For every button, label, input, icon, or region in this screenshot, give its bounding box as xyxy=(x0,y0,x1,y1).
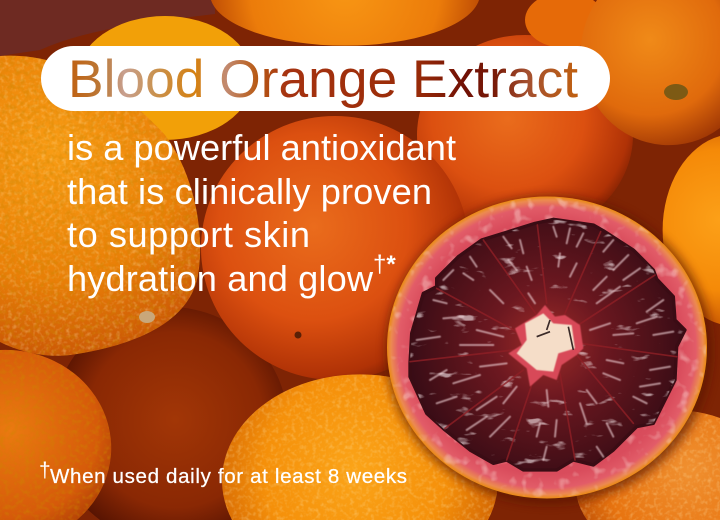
orange: upper middle right xyxy=(417,35,633,235)
blood orange slice xyxy=(386,196,712,504)
flesh mass xyxy=(410,219,685,470)
title pill xyxy=(41,46,610,111)
white center pith xyxy=(517,313,575,372)
orange: big left xyxy=(0,56,200,356)
footnote text: When used daily for at least 8 weeks xyxy=(50,465,407,488)
glossy pulp highlights xyxy=(408,218,687,472)
orange: top right xyxy=(581,0,720,145)
line 1: is a powerful antioxidant xyxy=(67,127,456,168)
slice rind and albedo xyxy=(387,196,707,498)
line 3: to support skin xyxy=(67,214,310,255)
orange: bottom right xyxy=(576,410,720,520)
orange: lower left behind xyxy=(52,307,288,520)
superscript dagger and asterisk: †* xyxy=(373,251,396,278)
orange: bottom left xyxy=(0,350,111,520)
orange: right edge xyxy=(663,136,720,324)
orange: top center xyxy=(211,0,479,46)
peel pits xyxy=(0,56,200,520)
orange: upper left behind title xyxy=(77,16,253,140)
flesh segments xyxy=(408,218,687,472)
rind mottling xyxy=(387,197,707,498)
title text: Blood Orange Extract xyxy=(68,50,578,109)
footnote xyxy=(39,459,407,488)
orange stem: left xyxy=(139,311,155,323)
line 4: hydration and glow xyxy=(67,258,374,299)
dark top-left corner xyxy=(0,0,215,56)
orange: top right small xyxy=(525,0,605,48)
segment highlights xyxy=(417,227,673,460)
line 2: that is clinically proven xyxy=(67,171,432,212)
shadow beneath slice xyxy=(386,196,712,504)
center core marks xyxy=(537,320,573,350)
pill background xyxy=(41,46,610,111)
dagger: † xyxy=(39,459,51,482)
orange: bottom center xyxy=(222,374,498,520)
orange: center xyxy=(201,116,469,380)
orange blemish: center xyxy=(294,332,302,338)
orange stem: top right xyxy=(664,84,688,100)
segment membranes xyxy=(410,225,677,460)
pink pith center xyxy=(508,305,583,387)
body statement xyxy=(67,127,456,299)
